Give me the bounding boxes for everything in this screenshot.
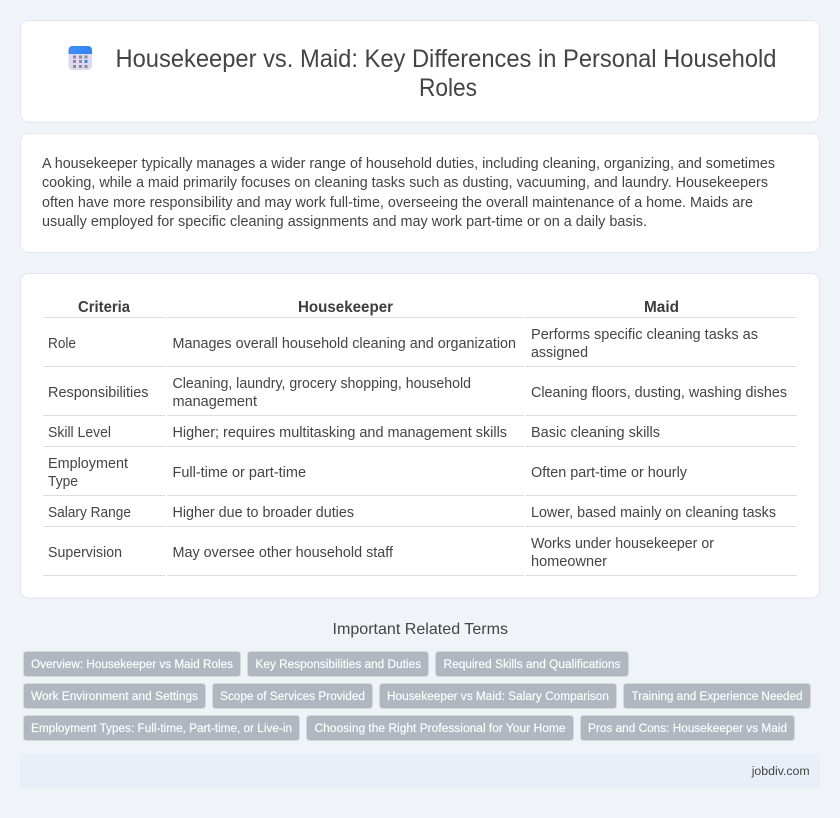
row: role: Performs specific cleaning tasks as [531, 327, 758, 343]
row: salary range [43, 505, 797, 527]
row: supervision: Supervision [48, 545, 122, 561]
tag [24, 652, 240, 676]
table header row: Housekeeper [298, 299, 393, 316]
panel: introduction [20, 134, 820, 252]
table header row: Maid [644, 299, 679, 316]
table header row [43, 299, 797, 318]
tag: Key Responsibilities and Duties [256, 657, 421, 671]
row: salary range: Lower, based mainly on cleaning tasks [531, 505, 776, 521]
title: Housekeeper vs. Maid: Key Differences in Personal Household [116, 45, 776, 73]
tag: Pros and Cons: Housekeeper vs Maid [588, 721, 787, 735]
heading: important related terms: Important Related Terms [332, 621, 508, 638]
tag [580, 716, 794, 740]
intro paragraph: cooking, while a maid primarily focuses on cleaning tasks such as dusting, vacuuming, and laundry. Housekeepers [42, 175, 768, 191]
tag [436, 652, 628, 676]
tag [306, 716, 574, 740]
tag [24, 716, 300, 740]
panel: header [20, 20, 820, 122]
row: employment type: Full-time or part-time [172, 465, 306, 481]
tag: Choosing the Right Professional for Your Home [314, 721, 566, 735]
tag: Required Skills and Qualifications [444, 657, 620, 671]
intro paragraph: often have more responsibility and may work full-time, overseeing the overall maintenance of a home. Maids are [42, 195, 753, 211]
tag: Training and Experience Needed [632, 689, 803, 703]
row: employment type [43, 456, 797, 496]
row: supervision: homeowner [531, 554, 607, 570]
row: salary range: Higher due to broader duties [172, 505, 354, 521]
tag [624, 684, 810, 708]
row: supervision: May oversee other household staff [172, 545, 394, 561]
tag: Employment Types: Full-time, Part-time, or Live-in [31, 721, 292, 735]
row: role: assigned [531, 345, 588, 361]
row: responsibilities: Cleaning, laundry, grocery shopping, household [172, 376, 471, 392]
tag: Scope of Services Provided [220, 689, 365, 703]
tag [24, 684, 206, 708]
row: skill level [43, 425, 797, 447]
related term tags [24, 652, 810, 740]
intro paragraph [42, 156, 775, 230]
intro paragraph: A housekeeper typically manages a wider range of household duties, including cleaning, organizing, and sometimes [42, 156, 775, 172]
row: salary range: Salary Range [48, 505, 131, 521]
row: employment type: Employment [48, 456, 128, 472]
row: role [43, 327, 797, 367]
tag [212, 684, 372, 708]
row: supervision [43, 536, 797, 576]
row: role: Manages overall household cleaning and organization [172, 336, 516, 352]
footer [20, 754, 820, 788]
title: Roles [419, 74, 477, 102]
row: responsibilities: Cleaning floors, dusting, washing dishes [531, 385, 787, 401]
tag [380, 684, 616, 708]
table header row: Criteria [78, 299, 130, 316]
footer source: jobdiv.com [751, 764, 810, 778]
intro paragraph: usually employed for specific cleaning assignments and may work part-time or on a daily basis. [42, 214, 647, 230]
row: responsibilities: Responsibilities [48, 385, 148, 401]
tag: Overview: Housekeeper vs Maid Roles [31, 657, 233, 671]
tag [248, 652, 428, 676]
panel: comparison table [20, 274, 820, 598]
row: skill level: Basic cleaning skills [531, 425, 660, 441]
row: skill level: Skill Level [48, 425, 111, 441]
row: responsibilities: management [172, 394, 257, 410]
row: responsibilities [43, 376, 797, 416]
row: supervision: Works under housekeeper or [531, 536, 714, 552]
title [116, 45, 776, 102]
tag: Work Environment and Settings [31, 689, 198, 703]
row: role: Role [48, 336, 76, 352]
row: skill level: Higher; requires multitasking and management skills [172, 425, 507, 441]
icon: calendar [68, 46, 92, 70]
row: employment type: Often part-time or hourly [531, 465, 688, 481]
tag: Housekeeper vs Maid: Salary Comparison [387, 689, 609, 703]
row: employment type: Type [48, 474, 78, 490]
